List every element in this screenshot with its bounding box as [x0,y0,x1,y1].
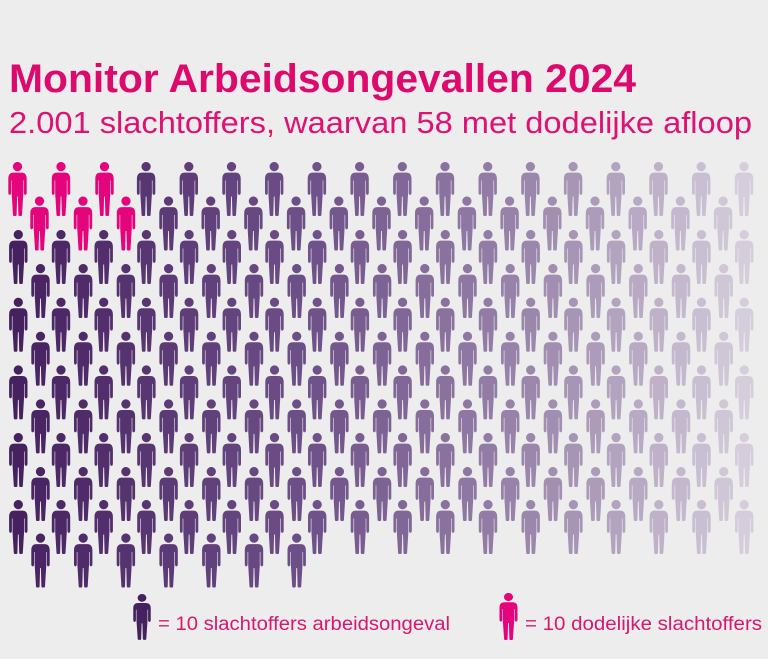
row 9 figures [9,433,753,487]
row 8 figures [31,399,733,453]
legend: fatal victims [499,593,762,640]
legend label: fatal: = 10 dodelijke slachtoffers [525,614,762,635]
icon: pink person [499,593,518,640]
row 10 figures [31,467,733,521]
row 4 figures [31,264,733,318]
legend label: accidents: = 10 slachtoffers arbeidsongeval [158,614,450,635]
subtitle: 2.001 slachtoffers, waarvan 58 met dodelijke afloop [9,105,752,140]
title: Monitor Arbeidsongevallen 2024 [9,57,637,101]
row 12 figures [31,534,306,588]
row 7 figures [9,365,753,419]
legend: victims of work accidents [133,594,450,640]
row 5 figures [9,298,753,352]
row 1 figures [8,162,753,216]
row 11 figures [9,500,753,554]
icon: dark person [133,594,151,640]
row 3 figures [9,230,753,284]
row 6 figures [31,332,733,386]
pictogram chart: 200 figures [8,162,753,588]
row 2 figures [30,196,732,250]
